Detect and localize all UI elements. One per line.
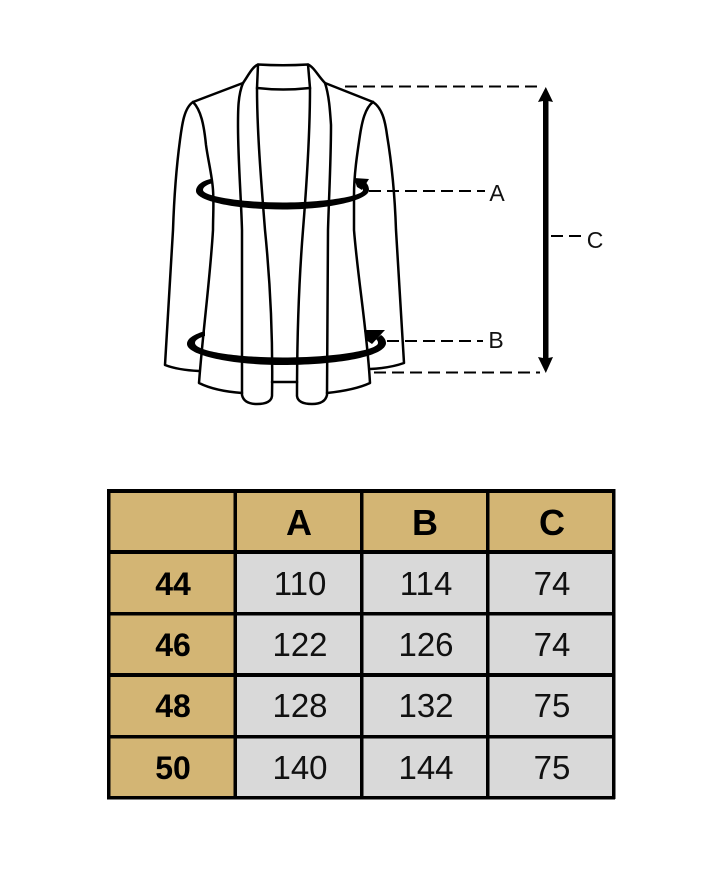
arrowhead A: [354, 178, 369, 190]
dashed guide: top of jacket: [345, 86, 537, 88]
header row: [286, 502, 565, 543]
row 46: 122: [272, 626, 328, 663]
arrowhead B: [364, 330, 385, 344]
row 50: 50: [155, 750, 191, 786]
label B: B: [488, 327, 504, 353]
dashed leader: B: [387, 340, 483, 342]
row 48: 132: [398, 687, 454, 724]
label A: A: [489, 180, 505, 206]
size table: [107, 489, 616, 800]
header row: A: [286, 502, 312, 543]
row 50: 140: [272, 749, 328, 786]
measurement ring A: [196, 178, 369, 210]
dashed leader: A: [369, 190, 485, 192]
header row: B: [412, 502, 438, 543]
row 48: [155, 687, 570, 724]
dashed leader: C: [551, 235, 582, 237]
row 48: 128: [272, 687, 328, 724]
row 44: 114: [400, 565, 452, 602]
jacket outline: [165, 64, 404, 404]
row 50: 144: [398, 749, 454, 786]
row 46: 46: [155, 627, 191, 663]
table grid: [107, 489, 616, 800]
diagram: jacket with measurements: [165, 64, 603, 404]
row 48: 75: [534, 687, 570, 724]
row 46: 74: [534, 626, 570, 663]
double arrow: length C: [538, 87, 553, 373]
header row: C: [539, 502, 565, 543]
row 46: 126: [398, 626, 454, 663]
row 44: 74: [534, 565, 570, 602]
row 48: 48: [155, 688, 191, 724]
row 46: [155, 626, 570, 663]
row 44: 44: [155, 566, 191, 602]
dashed guide: bottom of jacket: [374, 372, 540, 374]
measurement ring B: [187, 330, 386, 365]
row 50: 75: [534, 749, 570, 786]
row 50: [155, 749, 570, 786]
table cell backgrounds: [107, 489, 615, 799]
row 44: [155, 565, 570, 602]
row 44: 110: [274, 565, 326, 602]
label C: C: [587, 227, 603, 253]
